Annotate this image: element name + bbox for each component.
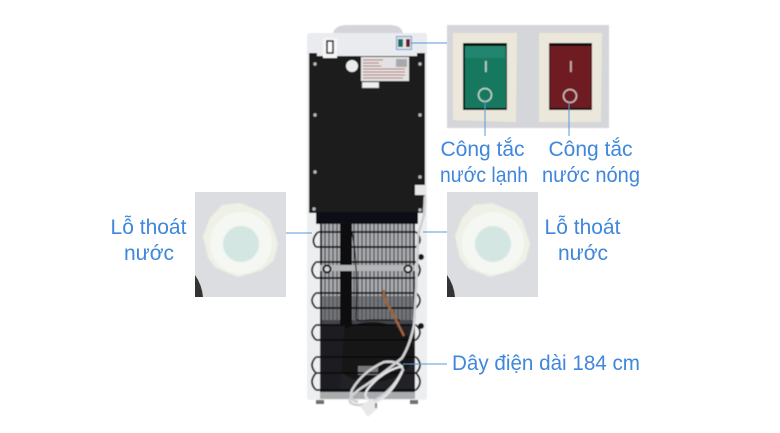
- label: cold water switch: Công tắc: [440, 138, 525, 161]
- switch mini: [396, 36, 412, 50]
- panel background: [447, 25, 609, 128]
- black rear panel: [309, 53, 425, 213]
- round sticker: [346, 60, 358, 72]
- cord clip: [415, 185, 426, 195]
- side holes: [418, 254, 424, 329]
- screws: [312, 62, 422, 212]
- label: power cord: Dây điện dài 184 cm: [452, 352, 640, 375]
- connector lines: [286, 43, 569, 364]
- panel: right drain plug: [447, 192, 538, 297]
- body: [307, 33, 427, 400]
- lower compartment: [320, 222, 415, 394]
- power cord: [350, 196, 425, 405]
- label: right drain: Lỗ thoát: [545, 216, 620, 239]
- copper tube: [384, 290, 404, 336]
- water dispenser rear view: [307, 25, 427, 417]
- bottom tray: [320, 392, 415, 399]
- condenser coil: [312, 232, 420, 390]
- green switch: [453, 33, 517, 122]
- condenser top bar: [316, 212, 418, 224]
- cross bar: [320, 265, 415, 271]
- label: hot water switch: Công tắc: [548, 138, 633, 161]
- label sticker: [361, 57, 409, 81]
- panel: switch close-up: [447, 25, 609, 128]
- red switch: [539, 33, 602, 122]
- panel: left drain plug: [195, 192, 286, 297]
- dark column: [340, 224, 352, 354]
- compressor: [330, 322, 414, 382]
- label: right drain: nước: [558, 242, 608, 265]
- label: hot water switch: nước nóng: [542, 164, 640, 187]
- plug: [360, 399, 378, 417]
- fins: [322, 224, 413, 320]
- label: left drain: Lỗ thoát: [111, 216, 186, 239]
- handle slot: [323, 38, 337, 58]
- top cap: [333, 25, 403, 34]
- feet: [316, 400, 418, 404]
- label: left drain: nước: [124, 242, 174, 265]
- label: cold water switch: nước lạnh: [440, 164, 528, 187]
- fixing bolts: [324, 266, 412, 272]
- top band: [307, 33, 427, 56]
- barcode: [362, 82, 379, 88]
